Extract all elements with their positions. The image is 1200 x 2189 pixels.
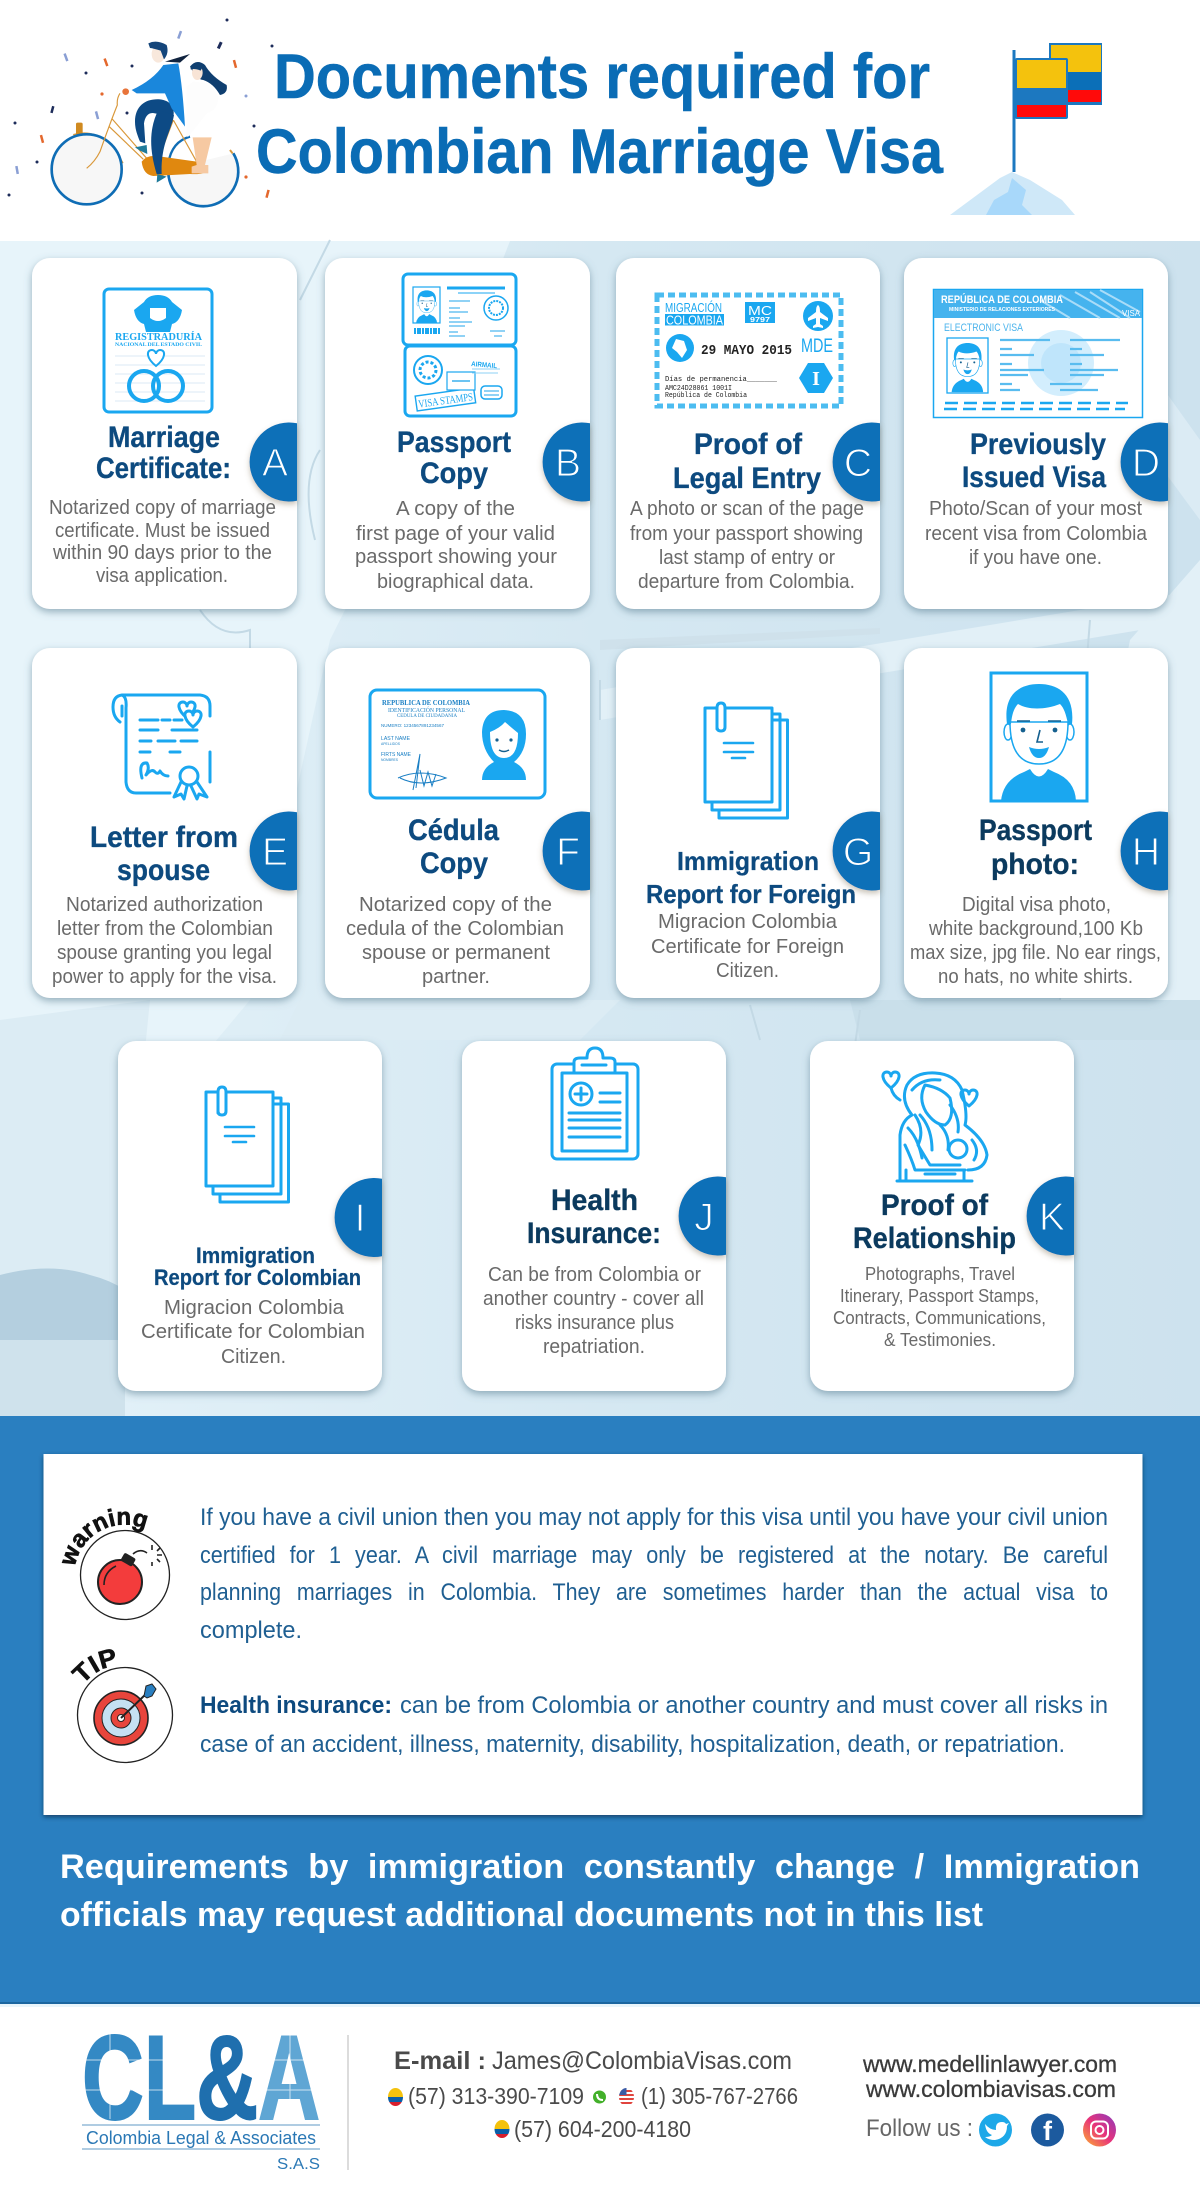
description: first page of your valid	[356, 522, 555, 545]
icon: electronic visa: VISA	[1122, 309, 1141, 318]
description	[833, 1263, 1046, 1350]
icon: migration entry stamp: República de Colombia	[665, 392, 747, 400]
heading: Report for Foreign	[646, 879, 856, 909]
heading: Report for Colombian	[154, 1265, 361, 1290]
footer divider	[347, 2035, 349, 2170]
description: Notarized copy of the	[359, 893, 552, 916]
description: Citizen.	[716, 959, 779, 982]
panel: C Proof of Legal Entry	[616, 258, 880, 609]
description	[355, 497, 557, 593]
description: Notarized copy of marriage	[49, 496, 276, 519]
icon: family with hearts	[883, 1072, 987, 1181]
tip text: case of an accident, illness, maternity, disability, hospitalization, death, or repatriation.	[200, 1731, 1065, 1758]
description: no hats, no white shirts.	[938, 965, 1133, 988]
icon: electronic visa: MINISTERIO DE RELACIONES EXTERIORES	[949, 307, 1055, 313]
title: Documents required for	[274, 42, 930, 112]
footer websites	[862, 2051, 1117, 2102]
footer contact details: James@ColombiaVisas.com	[492, 2047, 792, 2075]
badge G	[833, 812, 880, 890]
badge F	[543, 812, 590, 890]
description: biographical data.	[377, 570, 534, 593]
description	[141, 1296, 365, 1368]
icon: cédula ID card: REPUBLICA DE COLOMBIA	[382, 698, 471, 707]
description: last stamp of entry or	[659, 546, 835, 569]
badge G: G	[843, 831, 873, 874]
heading	[979, 814, 1092, 881]
heading: photo:	[991, 848, 1079, 881]
icon: migration entry stamp: I	[812, 368, 820, 390]
heading: Issued Visa	[962, 461, 1106, 494]
description	[483, 1263, 704, 1358]
heading: Passport	[979, 814, 1092, 847]
panel: I Immigration Report for Colombian	[118, 1041, 382, 1391]
panel: J Health Insurance	[462, 1041, 726, 1391]
icon: warning bomb	[62, 1508, 170, 1620]
icon: marriage certificate: REGISTRADURÍA	[115, 331, 202, 343]
description: Migracion Colombia	[164, 1296, 345, 1319]
icon: migration entry stamp: MIGRACIÓN	[665, 300, 722, 315]
icon: migration entry stamp: Días de permanencia_______	[665, 376, 777, 384]
description: recent visa from Colombia	[925, 522, 1148, 545]
icon: cédula ID card: NUMERO: 1234567891234567	[381, 723, 444, 728]
background band with faint city map	[0, 240, 1200, 1416]
heading: Previously	[970, 428, 1106, 461]
footer websites: www.colombiavisas.com	[865, 2076, 1116, 2102]
panel: G Immigration Report for Foreign	[616, 648, 880, 998]
icon: cédula ID card: IDENTIFICACIÓN PERSONAL	[388, 706, 465, 714]
heading: Proof of	[694, 428, 803, 461]
icon: US flag dot	[619, 2088, 634, 2104]
tip text	[200, 1692, 1108, 1758]
warning text	[200, 1504, 1108, 1644]
badge C	[833, 422, 880, 502]
icon: Instagram	[1083, 2114, 1116, 2146]
panel: K Proof of Relationship	[810, 1041, 1074, 1391]
badge C: C	[844, 442, 872, 485]
heading: Insurance:	[527, 1217, 661, 1250]
description: Photo/Scan of your most	[929, 497, 1142, 520]
heading: Letter from	[90, 821, 238, 854]
description: spouse or permanent	[362, 941, 550, 964]
warning text: planning marriages in Colombia. They are sometimes harder than the actual visa to	[200, 1579, 1108, 1606]
icon: stacked documents	[705, 703, 788, 818]
title	[256, 42, 944, 187]
icon: stacked documents	[206, 1087, 288, 1202]
icon: marriage certificate	[104, 289, 212, 412]
footer logo: CL&A: S.A.S	[277, 2156, 320, 2173]
heading	[673, 428, 821, 495]
description: certificate. Must be issued	[55, 519, 270, 542]
description: from your passport showing	[630, 522, 863, 545]
icon: migration entry stamp: MC	[748, 303, 772, 318]
icon: electronic visa: ELECTRONIC VISA	[944, 322, 1024, 334]
badge A: A	[262, 442, 288, 485]
icon: passport pages: AIRMAIL	[471, 361, 498, 370]
icon: medical clipboard	[552, 1048, 638, 1159]
badge A	[250, 422, 297, 502]
icon: cédula ID card: FIRTS NAME	[381, 752, 411, 758]
heading	[90, 821, 238, 887]
badge E	[250, 812, 297, 890]
header background	[0, 0, 1200, 241]
footer contact details: (57) 313-390-7109	[408, 2083, 584, 2109]
heading	[154, 1243, 361, 1290]
icon: WhatsApp	[593, 2090, 606, 2104]
badge D: D	[1132, 442, 1160, 485]
disclaimer banner text: Requirements by immigration constantly change / Immigration	[60, 1848, 1140, 1886]
badge I: I	[355, 1197, 365, 1240]
description: power to apply for the visa.	[52, 965, 277, 988]
icon: Colombian flag on a mountain	[950, 43, 1102, 215]
description	[630, 497, 864, 593]
panel: A Marriage Certificate	[32, 258, 297, 609]
footer websites: www.medellinlawyer.com	[862, 2051, 1117, 2077]
description: Contracts, Communications,	[833, 1307, 1046, 1328]
description	[346, 893, 564, 988]
icon: Colombia flag dot	[494, 2120, 510, 2138]
badge J: J	[694, 1196, 714, 1239]
heading: Immigration	[196, 1243, 315, 1268]
warning text: certified for 1 year. A civil marriage may only be registered at the notary. Be careful	[200, 1542, 1108, 1569]
description: Itinerary, Passport Stamps,	[840, 1285, 1039, 1306]
icon: passport photo portrait	[991, 673, 1087, 801]
description: repatriation.	[543, 1335, 645, 1358]
badge K: K	[1039, 1196, 1065, 1239]
heading: Copy	[420, 457, 488, 490]
panel: B Passport Copy	[325, 258, 590, 609]
heading	[646, 846, 856, 909]
heading	[853, 1189, 1016, 1255]
heading: Certificate:	[96, 452, 231, 485]
badge I	[335, 1178, 382, 1257]
description: spouse granting you legal	[57, 941, 272, 964]
badge F: F	[556, 831, 580, 874]
icon: passport pages	[403, 274, 516, 416]
icon: electronic visa	[934, 290, 1142, 418]
description	[910, 893, 1161, 988]
blue notes section	[0, 1416, 1200, 2007]
warning text: complete.	[200, 1617, 302, 1644]
description: within 90 days prior to the	[52, 541, 272, 564]
icon: Facebook: f	[1043, 2116, 1053, 2146]
description: passport showing your	[355, 545, 557, 568]
description: A copy of the	[396, 497, 515, 520]
icon: Colombia flag dot	[388, 2088, 403, 2106]
description: visa application.	[96, 564, 228, 587]
icon: passport pages: VISA STAMPS	[418, 391, 474, 411]
title: Colombian Marriage Visa	[256, 117, 944, 187]
panel: E Letter from spouse	[32, 648, 297, 998]
heading	[962, 428, 1106, 494]
description: cedula of the Colombian	[346, 917, 564, 940]
description: A photo or scan of the page	[630, 497, 864, 520]
footer social icons: Follow us :	[866, 2115, 973, 2142]
description: Migracion Colombia	[658, 910, 838, 933]
badge H	[1121, 812, 1168, 890]
icon: migration entry stamp: COLOMBIA	[666, 314, 724, 328]
heading: Passport	[397, 426, 511, 459]
description: letter from the Colombian	[57, 917, 273, 940]
heading: Health	[551, 1184, 638, 1217]
badge J	[679, 1176, 726, 1256]
footer contact details: E-mail :	[394, 2047, 486, 2075]
icon: migration entry stamp: AMC24D28061 1001I	[665, 385, 732, 393]
description: Notarized authorization	[66, 893, 263, 916]
footer logo: CL&A: CL&A	[82, 2011, 320, 2145]
heading: Legal Entry	[673, 462, 821, 495]
heading	[96, 421, 231, 485]
icon: tip target	[70, 1649, 174, 1764]
description	[651, 910, 844, 982]
heading: Relationship	[853, 1222, 1016, 1255]
description	[49, 496, 276, 587]
heading: Copy	[420, 847, 488, 880]
icon: migration entry stamp	[657, 295, 841, 406]
footer contact details	[388, 2047, 798, 2142]
icon: cédula ID card: APELLIDOS	[381, 742, 401, 746]
badge D	[1121, 422, 1168, 502]
icon: warning bomb: warning	[62, 1508, 148, 1564]
description: white background,100 Kb	[928, 917, 1143, 940]
footer social icons	[866, 2114, 1116, 2146]
description: Can be from Colombia or	[488, 1263, 701, 1286]
panel: H Passport photo	[904, 648, 1168, 998]
description: Certificate for Foreign	[651, 935, 844, 958]
icon: cédula ID card	[370, 690, 545, 798]
heading	[408, 814, 499, 880]
tip text: Health insurance:	[200, 1692, 392, 1719]
description	[52, 893, 277, 988]
panel: warning and tip box	[40, 1453, 1146, 1820]
heading: Marriage	[108, 421, 220, 454]
badge E: E	[262, 831, 288, 874]
description: Photographs, Travel	[865, 1263, 1015, 1284]
tip text: can be from Colombia or another country and must cover all risks in	[400, 1692, 1108, 1719]
heading: Proof of	[881, 1189, 989, 1222]
heading: Immigration	[677, 846, 819, 876]
heading	[527, 1184, 661, 1250]
heading: Cédula	[408, 814, 499, 847]
footer contact details: (1) 305-767-2766	[641, 2083, 798, 2109]
description: risks insurance plus	[515, 1311, 674, 1334]
badge K	[1027, 1176, 1074, 1256]
icon: migration entry stamp: 9797	[750, 317, 770, 324]
icon: tip target: TIP	[70, 1649, 115, 1681]
icon: marriage certificate: NACIONAL DEL ESTADO CIVIL	[115, 342, 202, 348]
heading: spouse	[117, 854, 210, 887]
panel: F Cédula Copy	[325, 648, 590, 998]
heading	[397, 426, 511, 490]
description: departure from Colombia.	[638, 570, 855, 593]
footer logo: CL&A: Colombia Legal & Associates	[86, 2128, 316, 2148]
disclaimer banner text: officials may request additional documents not in this list	[60, 1896, 983, 1934]
icon: migration entry stamp: MDE	[801, 336, 833, 357]
icon: migration entry stamp: 29 MAYO 2015	[701, 343, 792, 359]
icon: letter scroll with hearts and seal	[113, 695, 210, 799]
badge B	[543, 422, 590, 502]
icon: cédula ID card: LAST NAME	[381, 736, 410, 742]
icon: electronic visa: REPÚBLICA DE COLOMBIA	[941, 293, 1063, 306]
icon: Twitter	[979, 2114, 1012, 2146]
description: Citizen.	[221, 1345, 286, 1368]
description: max size, jpg file. No ear rings,	[910, 941, 1161, 964]
description: partner.	[422, 965, 490, 988]
footer contact details: (57) 604-200-4180	[514, 2116, 691, 2142]
icon: cédula ID card: NOMBRES	[381, 758, 399, 762]
icon: Facebook	[1031, 2114, 1064, 2146]
icon: cédula ID card: CEDULA DE CIUDADANIA	[397, 714, 457, 719]
description: if you have one.	[969, 546, 1102, 569]
description	[925, 497, 1148, 569]
badge H: H	[1132, 831, 1160, 874]
disclaimer banner text	[60, 1848, 1140, 1934]
badge B: B	[555, 442, 581, 485]
description: Certificate for Colombian	[141, 1320, 365, 1343]
panel: D Previously Issued Visa	[904, 258, 1168, 609]
description: another country - cover all	[483, 1287, 704, 1310]
warning text: If you have a civil union then you may not apply for this visa until you have your civil union	[200, 1504, 1108, 1531]
description: & Testimonies.	[884, 1329, 996, 1350]
description: Digital visa photo,	[962, 893, 1111, 916]
illustration: couple on a bicycle with confetti	[8, 18, 274, 206]
